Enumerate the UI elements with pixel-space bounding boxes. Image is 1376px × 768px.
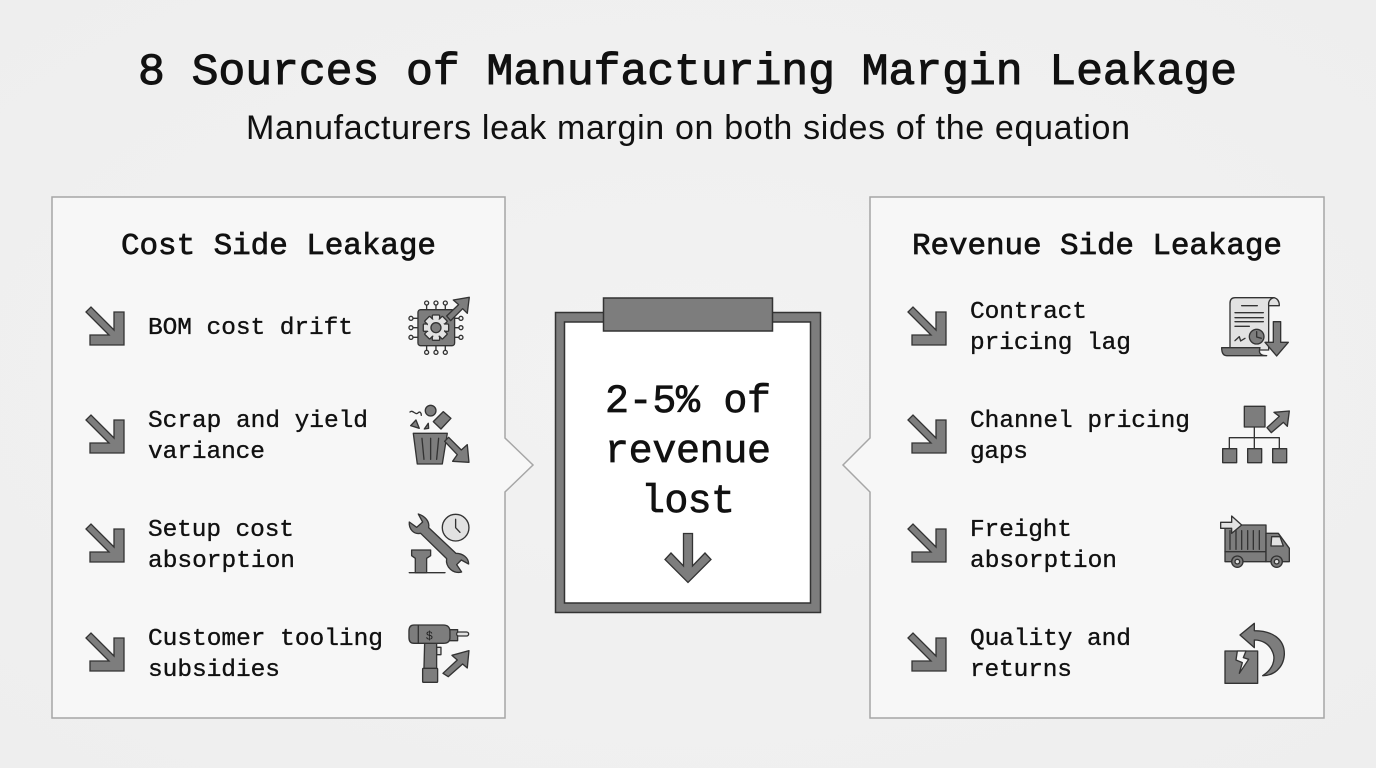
- label: Customer tooling: [148, 626, 383, 653]
- arrow: down right: [86, 633, 124, 671]
- subtitle: Manufacturers leak margin on both sides of the equation: [246, 109, 1130, 147]
- item: channel pricing gaps: [908, 406, 1289, 466]
- callout text: 2-5% of: [605, 380, 771, 425]
- item: scrap and yield variance: [86, 405, 469, 466]
- heading: revenue side: Revenue Side Leakage: [912, 229, 1282, 264]
- icon: wrench, clock and anvil: [409, 514, 469, 573]
- label: Freight: [970, 517, 1072, 544]
- label: Setup cost: [148, 517, 294, 544]
- icon: chip with gear and up arrow: [409, 297, 469, 354]
- panel background with pointer: [843, 197, 1324, 718]
- icon: channel hierarchy: [1223, 406, 1289, 463]
- heading: cost side: Cost Side Leakage: [121, 229, 436, 264]
- icon: drill with dollar sign: [409, 625, 469, 682]
- arrow: down right: [908, 633, 946, 671]
- label line 2: absorption: [970, 548, 1117, 575]
- label line 2: absorption: [148, 548, 295, 575]
- clipboard board: [556, 312, 820, 612]
- label: BOM cost drift: [148, 315, 353, 342]
- icon: scrap bin: [410, 405, 469, 464]
- arrow: down right: [908, 415, 946, 453]
- panel: cost side leakage: [52, 197, 533, 718]
- callout text line 3: lost: [641, 480, 735, 525]
- icon: truck: [1221, 516, 1289, 567]
- label: Channel pricing: [970, 408, 1190, 435]
- label: Contract: [970, 299, 1087, 326]
- label line 2: subsidies: [148, 657, 280, 684]
- arrow: down right: [86, 524, 124, 562]
- icon: broken box with return arrow: [1225, 623, 1284, 683]
- item: customer tooling subsidies: [86, 625, 469, 684]
- clipboard clip: [604, 298, 772, 331]
- clipboard callout: [556, 298, 820, 612]
- item: freight absorption: [908, 516, 1289, 575]
- arrow: down right: [86, 415, 124, 453]
- callout text line 2: revenue: [605, 430, 771, 475]
- clipboard paper: [564, 322, 810, 603]
- label line 2: pricing lag: [970, 330, 1131, 357]
- arrow: down right: [908, 307, 946, 345]
- label: Scrap and yield: [148, 408, 368, 435]
- title: 8 Sources of Manufacturing Margin Leakage: [138, 48, 1237, 98]
- label line 2: variance: [148, 439, 265, 466]
- icon: contract with down arrow: [1222, 298, 1288, 356]
- panel: revenue side leakage: [843, 197, 1324, 718]
- arrow: down: [665, 534, 711, 582]
- panel background with pointer: [52, 197, 533, 718]
- label line 2: returns: [970, 657, 1072, 684]
- item: setup cost absorption: [86, 514, 469, 575]
- icon: drill with dollar sign: $: [426, 630, 433, 644]
- item: quality and returns: [908, 623, 1284, 684]
- arrow: down right: [908, 524, 946, 562]
- label line 2: gaps: [970, 439, 1028, 466]
- arrow: down right: [86, 307, 124, 345]
- label: Quality and: [970, 626, 1131, 653]
- item: BOM cost drift: [86, 297, 469, 354]
- item: contract pricing lag: [908, 298, 1288, 357]
